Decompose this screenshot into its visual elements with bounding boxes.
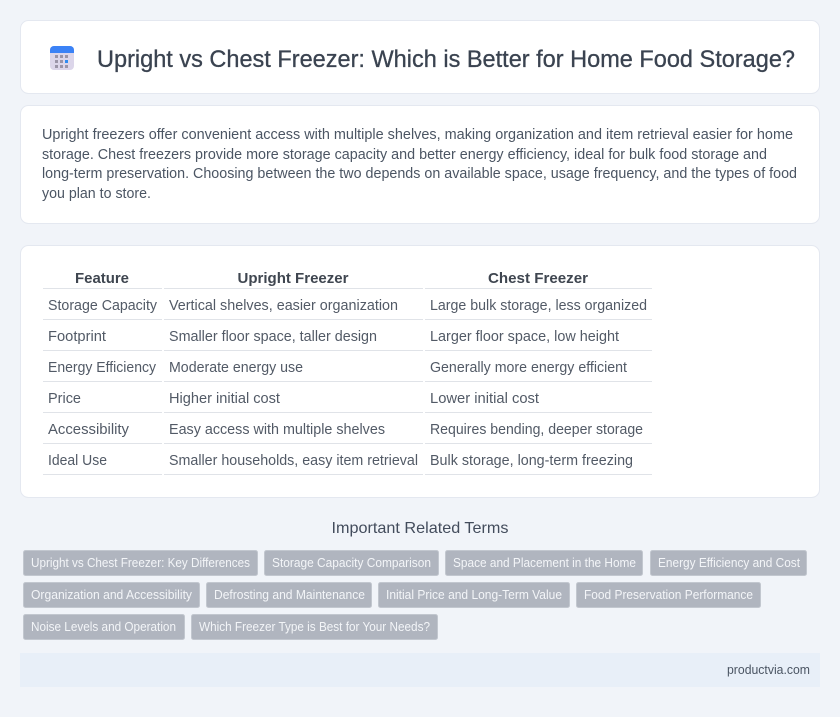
row: storage capacity: Large bulk storage, less organized	[430, 298, 647, 314]
related terms heading: Important Related Terms	[332, 520, 508, 537]
intro text: storage. Chest freezers provide more storage capacity and better energy efficiency, ideal for bulk food storage and	[42, 147, 767, 163]
title: Upright vs Chest Freezer: Which is Better for Home Food Storage?	[97, 46, 795, 73]
tag	[650, 550, 806, 576]
intro text: you plan to store.	[42, 186, 151, 202]
row: accessibility: Easy access with multiple shelves	[169, 422, 385, 438]
row: ideal use: Ideal Use	[48, 453, 107, 469]
tag	[378, 582, 570, 608]
related terms tags	[24, 550, 806, 640]
tag: Organization and Accessibility	[31, 588, 193, 602]
tag: Food Preservation Performance	[584, 588, 753, 602]
table header: Feature	[75, 270, 129, 287]
row: energy efficiency: Moderate energy use	[169, 360, 303, 376]
tag: Initial Price and Long-Term Value	[386, 588, 562, 602]
row: footprint: Larger floor space, low height	[430, 329, 619, 345]
row: storage capacity: Vertical shelves, easier organization	[169, 298, 398, 314]
row: footprint: Footprint	[48, 329, 106, 345]
row: energy efficiency: Energy Efficiency	[48, 360, 157, 376]
tag	[24, 614, 184, 640]
intro text: Upright freezers offer convenient access with multiple shelves, making organization and item retrieval easier for home	[42, 127, 793, 143]
tag: Which Freezer Type is Best for Your Needs?	[199, 620, 430, 634]
footer bar	[20, 653, 820, 687]
tag: Storage Capacity Comparison	[272, 556, 431, 570]
row: ideal use: Bulk storage, long-term freezing	[430, 453, 633, 469]
row: energy efficiency: Generally more energy efficient	[430, 360, 627, 376]
row: price	[48, 391, 539, 407]
row: footprint	[48, 329, 619, 345]
row: price: Higher initial cost	[169, 391, 280, 407]
tag: Upright vs Chest Freezer: Key Differences	[31, 556, 250, 570]
row: footprint: Smaller floor space, taller design	[169, 329, 377, 345]
table header	[75, 270, 588, 287]
header panel	[20, 20, 820, 94]
row: accessibility: Accessibility	[48, 422, 130, 438]
row: storage capacity: Storage Capacity	[48, 298, 158, 314]
tag	[264, 550, 438, 576]
row: price: Price	[48, 391, 81, 407]
tag: Noise Levels and Operation	[31, 620, 176, 634]
intro text	[42, 127, 797, 202]
tag	[206, 582, 372, 608]
intro text: long-term preservation. Choosing between the two depends on available space, usage frequency, and the types of food	[42, 166, 797, 182]
footer source: productvia.com	[727, 663, 810, 677]
tag: Defrosting and Maintenance	[214, 588, 365, 602]
tag: Energy Efficiency and Cost	[658, 556, 800, 570]
row: price: Lower initial cost	[430, 391, 539, 407]
intro panel	[20, 106, 820, 224]
table header: Chest Freezer	[488, 270, 588, 287]
tag	[24, 582, 200, 608]
tag	[192, 614, 438, 640]
tag	[24, 550, 258, 576]
row: energy efficiency	[48, 360, 627, 376]
tag	[446, 550, 642, 576]
icon: calendar	[50, 46, 74, 70]
tag: Space and Placement in the Home	[453, 556, 636, 570]
table header: Upright Freezer	[238, 270, 349, 287]
row: storage capacity	[48, 298, 647, 314]
row: ideal use	[48, 453, 633, 469]
tag	[576, 582, 760, 608]
comparison table	[43, 270, 652, 475]
table panel	[20, 246, 820, 498]
row: accessibility: Requires bending, deeper storage	[430, 422, 643, 438]
row: ideal use: Smaller households, easy item retrieval	[169, 453, 418, 469]
row: accessibility	[48, 422, 643, 438]
